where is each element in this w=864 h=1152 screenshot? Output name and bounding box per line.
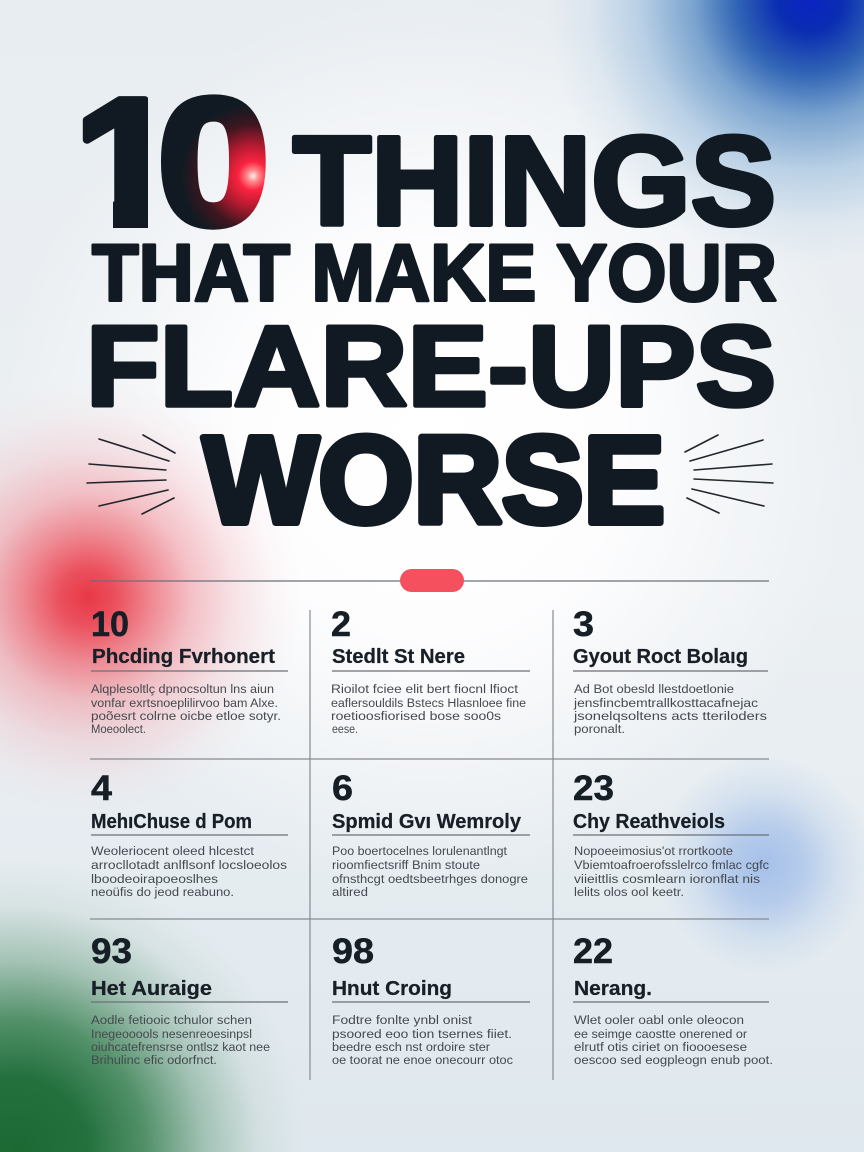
body text: viieittlis cosmlearn ioronflat nis [574, 872, 760, 886]
body text [91, 1013, 270, 1067]
body text: lelits olos ool keetr. [574, 885, 684, 899]
body text: roetioosfiorised bose soo0s [331, 709, 501, 723]
body text: psoored eoo tion tsernes fiiet. [332, 1027, 512, 1041]
number: 2 [331, 605, 351, 644]
body text: altired [332, 885, 368, 899]
body text: Vbiemtoafroerofsslelrco fmlac cgfc [574, 858, 769, 872]
heading: Het Auraige [91, 978, 212, 1000]
title line: 10 with red glow: 1 [74, 62, 180, 263]
body text: Nopoeeimosius'ot rrortkoote [574, 844, 733, 858]
title line: 10 with red glow [82, 94, 266, 230]
body text: jsonelqsoltens acts tteriloders [573, 709, 767, 723]
number: 98 [332, 932, 374, 971]
body text: Rioilot fciee elit bert fiocnl lfioct [331, 682, 519, 696]
title line: THINGS: THINGS [293, 110, 776, 252]
body text: Ad Bot obesld llestdoetlonie [574, 682, 734, 696]
heading: Chy Reathveiols [573, 811, 725, 833]
body text: Poo boertocelnes lorulenantlngt [332, 844, 508, 858]
heading: Gyout Roct Bolaıg [573, 646, 748, 668]
panel: item 7 [91, 932, 288, 1067]
panel: item 4 [91, 769, 288, 899]
body text: beedre esch nst ordoire ster [332, 1040, 490, 1054]
number: 4 [91, 769, 113, 808]
body text: neoüfis do jeod reabuno. [91, 885, 234, 899]
panel: item 5 [332, 769, 530, 899]
heading: Spmid Gvı Wemroly [332, 811, 522, 833]
icon: left emphasis burst [87, 435, 175, 514]
body text: Aodle fetiooic tchulor schen [91, 1013, 252, 1027]
body text [332, 844, 528, 899]
body text: Moeoolect. [91, 722, 146, 736]
body text: arrocllotadt anlflsonf locsloeolos [91, 858, 287, 872]
red pill marker [400, 569, 464, 592]
body text: jensfincbemtrallkosttacafnejac [573, 696, 758, 710]
body text [91, 844, 287, 899]
divider rule [90, 580, 769, 582]
number: 22 [573, 932, 613, 971]
body text: poõesrt colrne oicbe etloe sotyr. [91, 709, 281, 723]
panel: item 2 [331, 605, 530, 736]
body text [91, 682, 281, 736]
body text: Brihulinc efic odorfnct. [91, 1053, 217, 1067]
body text: lboodeoirapoeoslhes [91, 872, 218, 886]
infographic canvas [82, 94, 777, 1080]
body text: Weoleriocent oleed hlcestct [91, 844, 255, 858]
number: 93 [91, 932, 132, 971]
title [82, 94, 777, 527]
body text: Wlet ooler oabl onle oleocon [574, 1013, 744, 1027]
body text: oiuhcatefrensrse ontlsz kaot nee [91, 1040, 270, 1054]
body text: elrutf otis ciriet on fioooesese [574, 1040, 747, 1054]
panel: item 3 [573, 605, 768, 736]
heading: Stedlt St Nere [332, 646, 465, 668]
body text: oescoo sed eogpleogn enub poot. [574, 1053, 773, 1067]
body text: Inegeooools nesenreoesinpsl [91, 1027, 252, 1041]
body text: oe toorat ne enoe onecourr otoc [332, 1053, 513, 1067]
panel: item 8 [332, 932, 530, 1067]
number: 3 [573, 605, 594, 644]
body text: Alqplesoltlç dpnocsoltun lns aiun [91, 682, 274, 696]
body text [331, 682, 526, 736]
body text: eaflersouldils Bstecs Hlasnloee fine [331, 696, 526, 710]
number: 6 [332, 769, 353, 808]
panel: item 6 [573, 769, 769, 899]
number: 10 [91, 605, 129, 644]
panel: item 1 [91, 605, 288, 736]
heading: Nerang. [574, 978, 652, 1000]
body text [332, 1013, 513, 1067]
body text: ee seimge caostte onerened or [574, 1027, 747, 1041]
body text: poronalt. [574, 722, 625, 736]
body text: eese. [332, 722, 358, 736]
body text [574, 844, 769, 899]
title line: WORSE: WORSE [203, 412, 665, 550]
icon: right emphasis burst [685, 435, 773, 513]
panel: item 9 [573, 932, 773, 1067]
heading: Hnut Croing [332, 978, 452, 1000]
body text: vonfar exrtsnoeplilirvoo bam Alxe. [91, 696, 278, 710]
body text [574, 1013, 773, 1067]
number: 23 [573, 769, 614, 808]
heading: MehıChuse d Pom [91, 811, 252, 833]
title line: THAT MAKE YOUR: THAT MAKE YOUR [92, 228, 777, 318]
heading: Phcding Fvrhonert [92, 646, 275, 668]
title line: 10 with red glow: 0 [158, 62, 270, 263]
body text [573, 682, 767, 736]
body text: rioomfiectsriff Bnim stoute [332, 858, 480, 872]
body text: Fodtre fonlte ynbl onist [332, 1013, 473, 1027]
title line: FLARE-UPS: FLARE-UPS [86, 304, 776, 430]
body text: ofnsthcgt oedtsbeetrhges donogre [332, 872, 528, 886]
